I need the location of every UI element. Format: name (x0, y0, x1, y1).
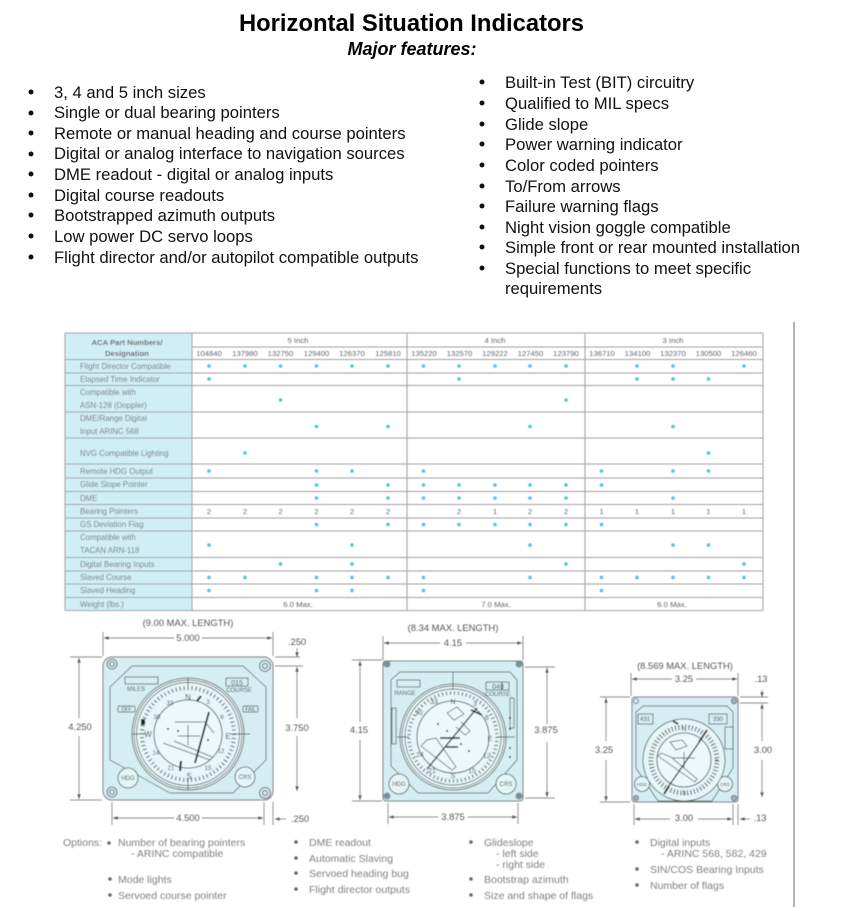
options column 1 (63, 837, 245, 902)
dimension labels 3 inch: (8.569 MAX. LENGTH) (637, 660, 733, 671)
table header: 135220 (411, 349, 437, 358)
table row labels: ASN-128 (Doppler) (80, 401, 147, 410)
instrument face 4 inch: COURSE (485, 692, 511, 698)
instrument face 4 inch: 21 (428, 768, 436, 775)
instrument face 5 inch: 30 (154, 715, 161, 721)
instrument face 4 inch: 6 (485, 715, 489, 722)
dimension labels 4 inch (350, 622, 558, 824)
options column 1: Servoed course pointer (118, 890, 227, 902)
table row labels: NVG Compatible Lighting (80, 449, 169, 458)
instrument face 3 inch: 330 (713, 717, 724, 723)
instrument face 3 inch (632, 697, 738, 802)
table header: 137980 (232, 349, 258, 358)
instrument face 4 inch: HDG (392, 782, 406, 788)
table row labels: DME/Range Digital (80, 414, 147, 423)
table bearing pointer counts and weights: 6.0 Max. (657, 600, 687, 609)
table header: 3 Inch (663, 336, 683, 345)
instrument face 5 inch: MILES (127, 687, 145, 693)
left feature list: Bootstrapped azimuth outputs (54, 206, 275, 225)
dimension labels 5 inch: 5.000 (176, 632, 200, 643)
table header: 5 Inch (288, 336, 308, 345)
options list (63, 837, 767, 902)
instrument face 4 inch: S (451, 773, 456, 780)
table row labels: Compatible with (80, 533, 136, 542)
table header: 123790 (553, 349, 579, 358)
options column 3: Bootstrap azimuth (484, 874, 569, 886)
right feature list: Glide slope (505, 115, 588, 134)
table row labels (80, 362, 171, 609)
table header: 132570 (447, 349, 472, 358)
instrument face 4 inch: 33 (430, 699, 438, 706)
options column 2: Servoed heading bug (309, 868, 409, 880)
specification table (65, 333, 763, 610)
table row labels: Flight Director Compatible (80, 362, 171, 371)
table row labels: Elapsed Time Indicator (80, 375, 160, 384)
table row labels: Weight (lbs.) (80, 600, 124, 609)
right feature list: Special functions to meet specific (505, 259, 751, 278)
table bearing pointer counts and weights: 2 (564, 507, 568, 516)
table bearing pointer counts and weights: 2 (528, 507, 532, 516)
instrument face 5 inch (103, 657, 273, 800)
table feature dots (207, 364, 746, 592)
instrument face 5 inch: 21 (168, 766, 175, 772)
options column 3: Glideslope (484, 837, 534, 849)
dimension labels 5 inch: 3.750 (285, 722, 309, 733)
instrument face 4 inch: CRS (500, 782, 512, 788)
table header: 132370 (660, 349, 686, 358)
instrument face 4 inch: N (450, 699, 456, 706)
table header: 132750 (268, 349, 293, 358)
right feature list: Night vision goggle compatible (505, 218, 731, 237)
right feature list: Failure warning flags (505, 197, 659, 216)
table bearing pointer counts and weights: 2 (386, 507, 390, 516)
options column 3 (469, 837, 593, 902)
table row labels: Remote HDG Output (80, 467, 154, 476)
dimension labels 3 inch: 3.00 (675, 812, 693, 823)
dimension labels 4 inch: 3.875 (534, 724, 558, 735)
table header: 129222 (482, 349, 508, 358)
instrument face 5 inch: 24 (153, 751, 160, 757)
dimension labels 5 inch (68, 617, 309, 825)
options column 3: Size and shape of flags (484, 890, 593, 902)
table bearing pointer counts and weights: 1 (599, 507, 604, 516)
dimension labels 3 inch: 3.25 (675, 673, 693, 684)
dimension labels 4 inch: (8.34 MAX. LENGTH) (408, 622, 498, 633)
options column 1: - ARINC compatible (131, 848, 223, 860)
table header: 4 Inch (485, 336, 505, 345)
table header (91, 336, 757, 358)
instrument face 5 inch: E (225, 732, 231, 741)
table bearing pointer counts and weights: 2 (278, 507, 283, 516)
table bearing pointer counts and weights: 1 (635, 507, 639, 516)
instrument face 5 inch: N (185, 693, 191, 702)
instrument face 4 inch: 040 (492, 684, 504, 691)
options column 1: Number of bearing pointers (118, 837, 245, 849)
table row labels: DME (80, 494, 97, 503)
5 inch instrument diagram (68, 617, 309, 825)
dimension labels 4 inch: 4.15 (444, 637, 462, 648)
table bearing pointer counts and weights: 1 (742, 507, 746, 516)
instrument face 5 inch: 3 (206, 700, 210, 706)
dimension labels 5 inch: (9.00 MAX. LENGTH) (143, 617, 233, 628)
right feature list: Simple front or rear mounted installation (505, 238, 800, 257)
right feature list: Power warning indicator (505, 135, 683, 154)
left feature list: Low power DC servo loops (54, 227, 253, 246)
left feature list: Single or dual bearing pointers (54, 103, 280, 122)
table header: 129400 (304, 349, 329, 358)
instrument face 4 inch: 3 (473, 701, 477, 708)
table header: 126460 (731, 349, 757, 358)
instrument face 5 inch: 33 (167, 701, 174, 707)
options column 2: Flight director outputs (309, 884, 410, 896)
instrument face 5 inch: HDG (121, 776, 135, 782)
left feature list: Remote or manual heading and course pointers (54, 124, 406, 143)
options column 4 (635, 837, 767, 892)
3 inch instrument diagram (595, 660, 772, 825)
left feature list: Digital course readouts (54, 186, 224, 205)
instrument face 3 inch: N (682, 727, 686, 733)
instrument face 5 inch: S (186, 772, 192, 781)
table header: 126370 (339, 349, 365, 358)
options column 1: Options: (63, 837, 102, 849)
options column 2 (294, 837, 410, 896)
table row labels: Slaved Heading (80, 586, 135, 595)
table row labels: TACAN ARN-118 (80, 546, 140, 555)
table bearing pointer counts and weights: 1 (706, 507, 711, 516)
subtitle: Major features: (347, 39, 477, 59)
dimension labels 5 inch: .250 (291, 813, 309, 824)
right feature list: Color coded pointers (505, 156, 659, 175)
table bearing pointer counts and weights: 2 (207, 507, 211, 516)
table bearing pointer counts and weights: 2 (457, 507, 461, 516)
table bearing pointer counts and weights: 1 (671, 507, 675, 516)
right feature list (480, 73, 800, 298)
instrument face 4 inch: RANGE (394, 691, 416, 697)
table header: 130500 (696, 349, 721, 358)
table row labels: Slaved Course (80, 573, 132, 582)
table header: 134100 (625, 349, 650, 358)
table bearing pointer counts and weights: 7.0 Max. (481, 600, 511, 609)
table row labels: Compatible with (80, 388, 136, 397)
instrument face 5 inch: 6 (220, 715, 224, 721)
left feature list: 3, 4 and 5 inch sizes (54, 83, 206, 102)
right feature list: To/From arrows (505, 177, 621, 196)
instrument face 3 inch: HDG (637, 782, 647, 787)
table row labels: Glide Slope Pointer (80, 480, 148, 489)
options column 2: DME readout (309, 837, 371, 849)
instrument face 4 inch: 30 (415, 710, 423, 717)
dimension labels 4 inch: 3.875 (441, 811, 465, 822)
instrument face 4 inch (383, 660, 523, 801)
dimension labels 3 inch: 3.25 (595, 744, 613, 755)
right feature list: Qualified to MIL specs (505, 94, 669, 113)
instrument face 5 inch: CRS (239, 775, 251, 781)
dimension labels 3 inch: .13 (753, 812, 767, 823)
instrument face 5 inch: OFF (122, 707, 132, 713)
instrument face 5 inch: 12 (218, 749, 225, 755)
instrument face 3 inch: CRS (720, 782, 730, 787)
instrument face 3 inch: S (682, 791, 686, 797)
table row labels: Digital Bearing Inputs (80, 560, 155, 569)
options column 2: Automatic Slaving (309, 853, 393, 865)
instrument face 3 inch: E (715, 758, 719, 764)
options column 4: SIN/COS Bearing Inputs (650, 864, 764, 876)
instrument face 5 inch: W (144, 730, 152, 739)
left feature list: DME readout - digital or analog inputs (54, 165, 333, 184)
dimension labels 3 inch (595, 660, 772, 825)
table bearing pointer counts and weights: 1 (493, 507, 497, 516)
table grid (65, 333, 763, 610)
table row labels: Input ARINC 568 (80, 427, 139, 436)
left feature list (28, 83, 418, 267)
options column 1: Mode lights (118, 874, 172, 886)
table bearing pointer counts and weights (207, 507, 746, 609)
table header: 127450 (518, 349, 543, 358)
dimension labels 3 inch: .13 (754, 673, 768, 684)
instrument face 4 inch: E (488, 736, 493, 743)
dimension labels 5 inch: 4.250 (68, 721, 92, 732)
table bearing pointer counts and weights: 2 (350, 507, 354, 516)
table bearing pointer counts and weights: 6.0 Max. (283, 600, 313, 609)
scanned page right border (793, 322, 795, 907)
options column 3: - left side (496, 848, 539, 860)
instrument face 5 inch: COURSE (226, 688, 252, 694)
table bearing pointer counts and weights: 2 (243, 507, 247, 516)
dimension labels 4 inch: 4.15 (350, 724, 368, 735)
table header: 136710 (589, 349, 615, 358)
instrument face 4 inch: 24 (416, 752, 424, 759)
right feature list: requirements (505, 279, 602, 298)
4 inch instrument diagram (350, 622, 558, 824)
table header: 104840 (196, 349, 222, 358)
instrument face 5 inch: 15 (205, 766, 212, 772)
instrument face 4 inch: 12 (483, 753, 491, 760)
options column 4: Digital inputs (650, 837, 710, 849)
options column 3: - right side (496, 859, 545, 871)
options column 4: - ARINC 568, 582, 429 (661, 848, 767, 860)
instrument face 4 inch: 15 (468, 768, 476, 775)
table header: 125810 (375, 349, 401, 358)
table label column (65, 333, 192, 610)
table header: Designation (105, 349, 149, 358)
left feature list: Digital or analog interface to navigation sources (54, 144, 405, 163)
left feature list: Flight director and/or autopilot compatible outputs (54, 248, 418, 267)
title: Horizontal Situation Indicators (239, 10, 584, 37)
instrument face 3 inch: 431 (640, 717, 651, 723)
table row labels: GS Deviation Flag (80, 520, 144, 529)
dimension labels 5 inch: .250 (288, 636, 306, 647)
dimension labels 3 inch: 3.00 (754, 744, 772, 755)
instrument face 5 inch: FAIL (245, 707, 256, 713)
table bearing pointer counts and weights: 2 (314, 507, 319, 516)
options column 4: Number of flags (650, 880, 724, 892)
instrument face 5 inch: 015 (231, 680, 243, 687)
table header: ACA Part Numbers/ (91, 338, 163, 347)
table row labels: Bearing Pointers (80, 507, 138, 516)
right feature list: Built-in Test (BIT) circuitry (505, 73, 695, 92)
dimension labels 5 inch: 4.500 (176, 812, 200, 823)
